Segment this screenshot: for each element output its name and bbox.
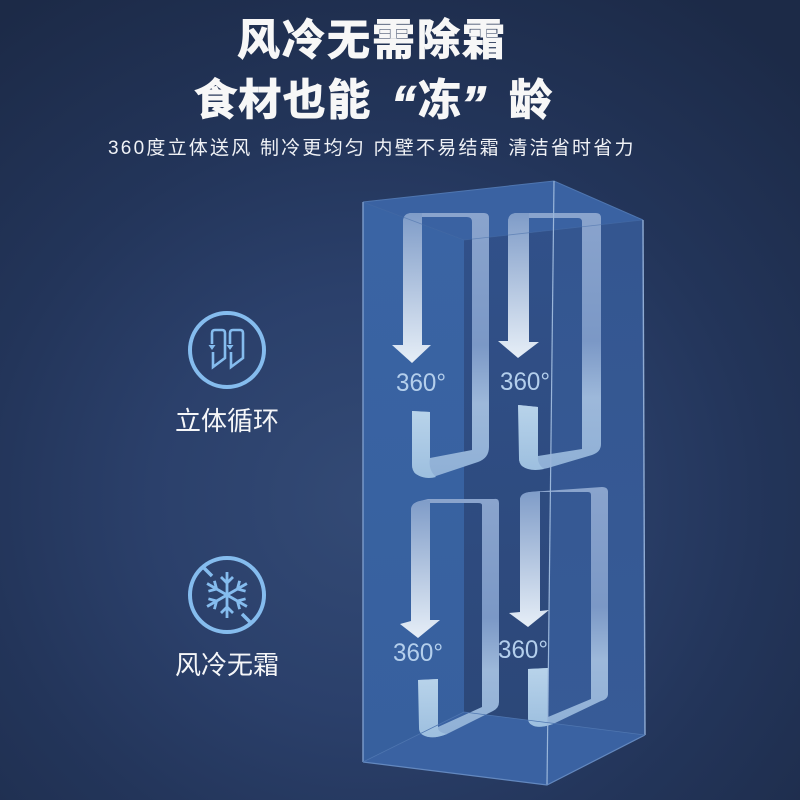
360 degree labels: 360° (500, 368, 550, 396)
title line 2: 冻 (418, 77, 461, 125)
airflow loop: top left (392, 213, 489, 478)
subtitle: 360度立体送风 制冷更均匀 内壁不易结霜 清洁省时省力 (108, 138, 636, 159)
360 degree labels: 360° (393, 639, 443, 667)
cabinet edges (363, 181, 645, 785)
label: 风冷无霜: 风冷无霜 (175, 650, 279, 680)
title line 2: “ (391, 76, 416, 132)
icon: 3D circulation (188, 311, 266, 389)
label: 立体循环: 立体循环 (175, 406, 279, 436)
airflow loop: top right (498, 213, 601, 470)
360 degree labels: 360° (498, 636, 548, 664)
airflow loop: bottom left (400, 499, 499, 737)
title line 2 (194, 76, 552, 132)
360 degree labels: 360° (396, 369, 446, 397)
icon: no frost snowflake (188, 556, 266, 634)
title line 2: 食材也能 (194, 77, 372, 125)
360 degree labels (393, 368, 550, 667)
title line 2: ” (461, 76, 486, 132)
cabinet faces (363, 181, 645, 785)
title line 1: 风冷无需除霜 (237, 17, 507, 65)
airflow loop: bottom right (509, 487, 608, 727)
title line 2: 龄 (509, 77, 552, 125)
